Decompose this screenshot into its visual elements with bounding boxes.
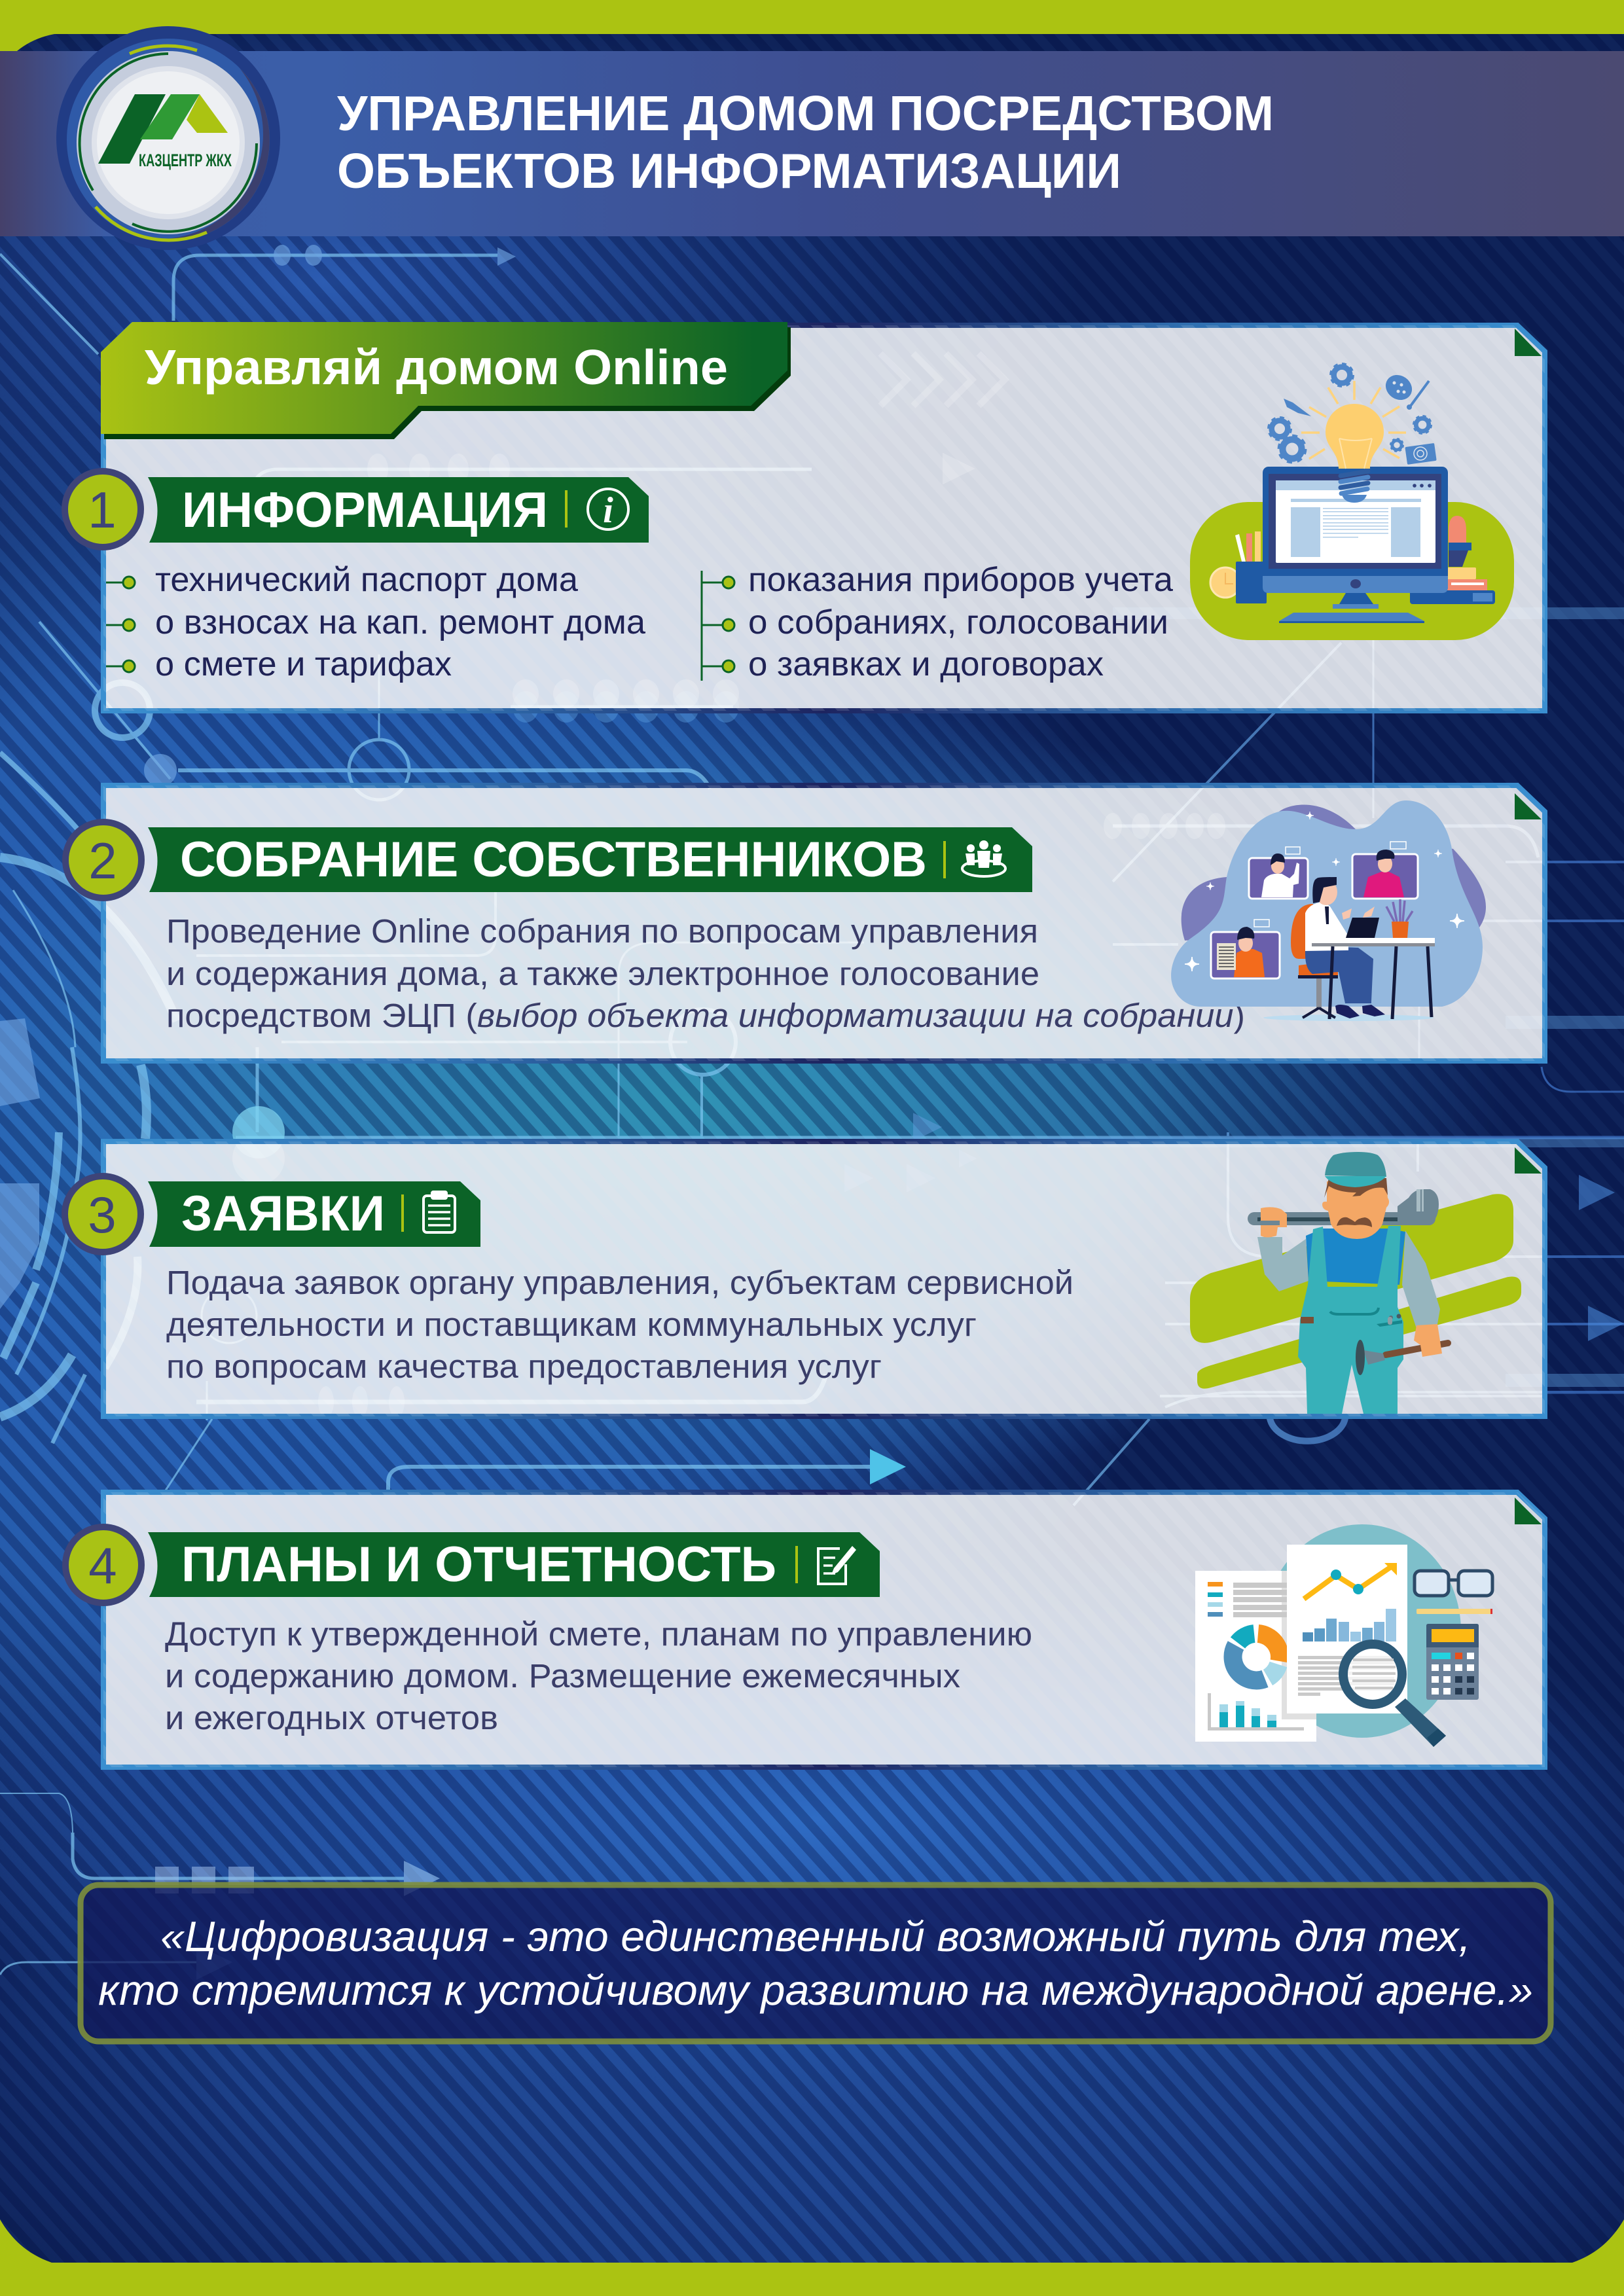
bullet list right: показания приборов учета (748, 561, 1173, 599)
video frame 1 (1249, 847, 1308, 899)
number badge 4: 4 (88, 1537, 117, 1594)
bulb (1326, 404, 1384, 503)
section 2 text: Проведение Online собрания по вопросам управления (166, 912, 1038, 950)
number badge 2 (65, 822, 141, 898)
header band (0, 51, 1624, 236)
gears (1269, 365, 1431, 461)
number badge 2: 2 (88, 832, 117, 889)
icon: note with pen (818, 1546, 856, 1584)
section 2 text: посредством ЭЦП ( выбор объекта информатизации на собрании ) (166, 997, 1245, 1034)
quote box: «Цифровизация - это единственный возможный путь для тех, (160, 1912, 1471, 1960)
glasses (1415, 1571, 1492, 1596)
section 3 text: по вопросам качества предоставления услуг (166, 1348, 882, 1385)
monitor (1263, 467, 1448, 623)
number badge 4 (65, 1527, 141, 1603)
quote box: кто стремится к устойчивому развитию на международной арене.» (98, 1966, 1533, 2014)
icon: info (588, 489, 628, 531)
illustration: plumber (1190, 1152, 1521, 1414)
bullet list left (106, 561, 645, 683)
bullet list right: о заявках и договорах (748, 645, 1104, 683)
number badge 1: 1 (88, 481, 117, 539)
plunger and hand (1386, 1343, 1448, 1355)
number badge 3: 3 (88, 1186, 117, 1244)
section 1 heading: ИНФОРМАЦИЯ (182, 482, 548, 538)
panel: 3 заявки (103, 1141, 1545, 1416)
section 2 heading (65, 822, 1032, 898)
section 4 text: и содержанию домом. Размещение ежемесячных (165, 1657, 960, 1695)
top green band (0, 0, 1624, 70)
section 3 heading: ЗАЯВКИ (181, 1186, 385, 1242)
rays (1301, 381, 1406, 459)
background circuit decoration (0, 245, 1624, 1980)
body (1306, 1229, 1405, 1285)
desk items (1210, 516, 1495, 604)
panel: 1 информация (103, 325, 1545, 711)
calculator (1426, 1624, 1479, 1700)
logo (56, 26, 280, 250)
bullet list left: о смете и тарифах (155, 645, 452, 683)
title (337, 86, 1274, 198)
wrench (1248, 1189, 1439, 1225)
seated man at desk (1291, 877, 1435, 1019)
arms (1257, 1237, 1308, 1291)
section 3 text (166, 1264, 1074, 1385)
panel: 2 собрание (103, 785, 1545, 1061)
illustration: reports and analytics (1195, 1524, 1492, 1747)
palette and brush (1380, 370, 1429, 410)
panel: 4 планы (103, 1492, 1545, 1767)
title: ОБЪЕКТОВ ИНФОРМАТИЗАЦИИ (337, 143, 1121, 198)
section 2 text (166, 912, 1245, 1034)
section 2 text: и содержания дома, а также электронное голосование (166, 955, 1039, 992)
icon: people (962, 840, 1005, 876)
video frame 2 (1352, 842, 1418, 899)
section 3 heading (65, 1176, 480, 1252)
pencil (1416, 1609, 1492, 1614)
section 4 text: и ежегодных отчетов (165, 1699, 498, 1736)
bullet list right (702, 561, 1173, 683)
banner: управляй домом online (101, 322, 791, 439)
sparkles (1185, 812, 1464, 971)
magnifier (1343, 1644, 1446, 1747)
section 3 text: Подача заявок органу управления, субъектам сервисной (166, 1264, 1074, 1301)
report sheet with donut (1195, 1571, 1316, 1742)
section 3 text: деятельности и поставщикам коммунальных услуг (166, 1306, 977, 1343)
camera (1405, 443, 1437, 465)
banner: управляй домом online: Управляй домом Online (145, 340, 728, 395)
bottom green band (0, 2219, 1624, 2296)
title: УПРАВЛЕНИЕ ДОМОМ ПОСРЕДСТВОМ (337, 86, 1274, 141)
report sheet with trend (1287, 1545, 1407, 1713)
section 4 heading (65, 1527, 880, 1603)
bullet list left: технический паспорт дома (155, 561, 578, 599)
bullet list right: о собраниях, голосовании (748, 603, 1168, 641)
bullet list left: о взносах на кап. ремонт дома (155, 603, 645, 641)
section 2 heading: СОБРАНИЕ СОБСТВЕННИКОВ (180, 832, 927, 888)
section 4 text: Доступ к утвержденной смете, планам по управлению (165, 1615, 1032, 1653)
panel overlay circuit lines (111, 351, 1542, 1506)
quote box (81, 1885, 1551, 2041)
illustration: online meeting (1171, 800, 1486, 1021)
logo text: КАЗЦЕНТР ЖКХ (139, 151, 232, 170)
number badge 3 (65, 1176, 141, 1252)
head (1322, 1181, 1389, 1239)
pen nib (1284, 399, 1311, 416)
illustration: computer with light bulb (1190, 365, 1514, 640)
section 4 text (165, 1615, 1032, 1736)
number badge 1 (65, 471, 141, 547)
section 1 heading (65, 471, 649, 547)
icon: info: i (603, 490, 613, 531)
video frame 3 (1211, 920, 1280, 978)
section 4 heading: ПЛАНЫ И ОТЧЕТНОСТЬ (181, 1537, 776, 1592)
icon: clipboard (424, 1192, 455, 1232)
